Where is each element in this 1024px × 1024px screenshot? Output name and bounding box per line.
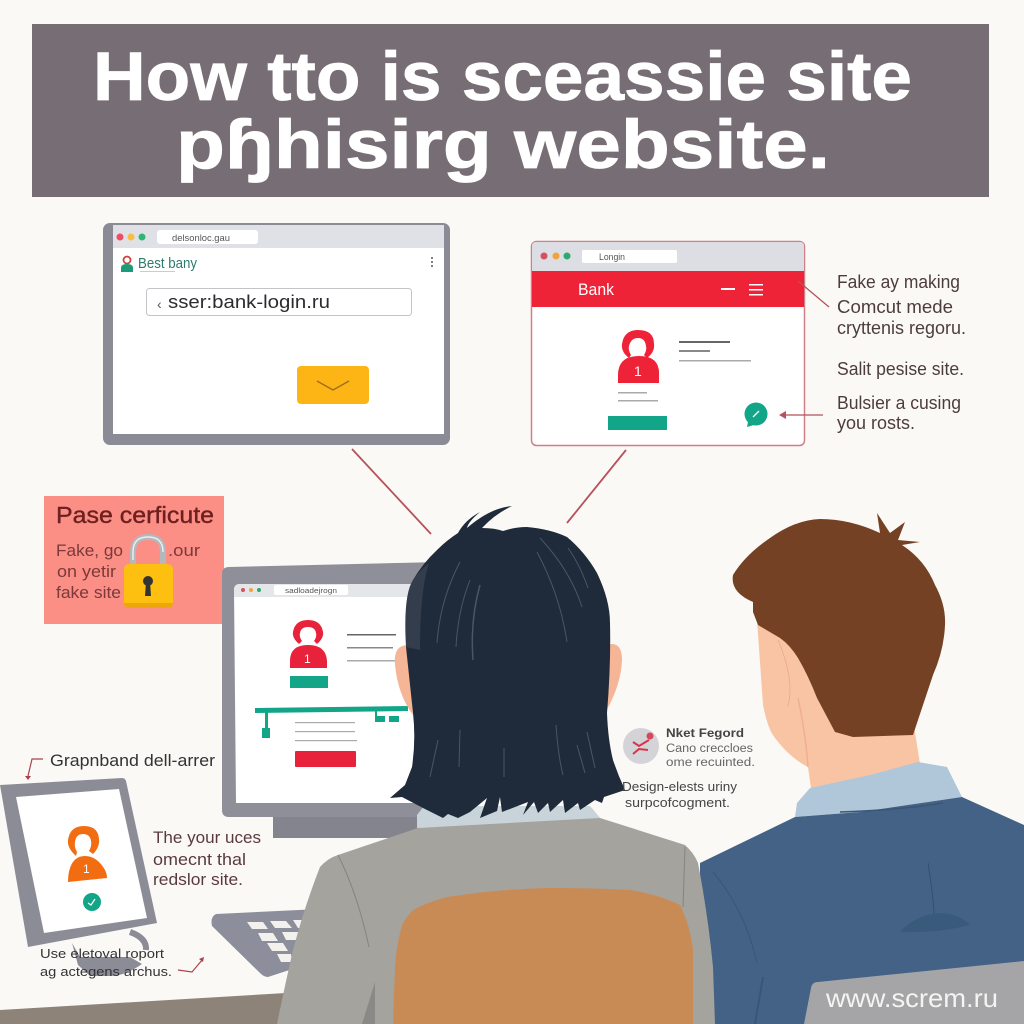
- text block: design: [622, 779, 738, 810]
- desk: [0, 991, 320, 1024]
- woman hair: [390, 506, 625, 818]
- panel: fake browser window: delsonloc.gau: [172, 233, 230, 244]
- title: [32, 24, 989, 197]
- panel: fake browser window: [103, 223, 450, 445]
- text block: right annotations: cryttenis regoru.: [837, 318, 966, 338]
- panel: certificate callout: Pase cerficute: [56, 502, 214, 528]
- address field: ‹: [157, 296, 162, 312]
- chair: [393, 888, 693, 1024]
- address field: [146, 288, 412, 316]
- keyboard: [212, 909, 320, 977]
- red button: [295, 751, 356, 767]
- text block: the your uces: The your uces: [153, 828, 261, 847]
- woman collar: [417, 806, 602, 828]
- panel: tablet: [0, 778, 157, 976]
- title: How tto is sceassie site: [93, 38, 912, 115]
- icon: orange padlock person: [68, 826, 107, 882]
- text block: right annotations: Bulsier a cusing: [837, 393, 961, 413]
- man figure: [700, 513, 1024, 1024]
- icon: check badge: [83, 893, 101, 911]
- logo text: Best bany: Best bany: [138, 256, 198, 272]
- panel: certificate callout: Fake, go: [56, 541, 123, 560]
- text block: right annotations: [837, 272, 966, 433]
- text block: use eletoval: ag actegens archus.: [40, 964, 172, 979]
- text block: use eletoval: Use eletoval roport: [40, 946, 164, 961]
- callout: market regard: Cano creccloes: [666, 743, 753, 755]
- panel: fake bank page: Bank: [578, 280, 614, 299]
- panel: desktop monitor: [222, 562, 440, 838]
- icon: red padlock person: 1: [634, 363, 642, 379]
- woman ears: [395, 645, 413, 715]
- arrow: connector top right: [567, 450, 626, 523]
- watermark badge: [804, 961, 1024, 1024]
- icon: red padlock person: [618, 330, 659, 383]
- watermark badge: www.screm.ru: [825, 983, 998, 1013]
- text block: design: Design-elests uriny: [622, 779, 738, 794]
- panel: certificate callout: .our: [168, 541, 200, 560]
- man collar: [795, 762, 962, 817]
- text block: right annotations: Fake ay making: [837, 272, 960, 292]
- text block: the your uces: omecnt thal: [153, 850, 246, 869]
- icon: gold padlock: [124, 537, 173, 608]
- label: grapnband: Grapnband dell-arrer: [50, 752, 216, 770]
- arrow: connector top left: [352, 449, 431, 534]
- text block: design: surpcofcogment.: [625, 795, 730, 810]
- panel: certificate callout: [44, 496, 224, 624]
- callout: market regard: ome recuinted.: [666, 757, 755, 769]
- text block: right annotations: Salit pesise site.: [837, 359, 964, 379]
- icon: orange padlock person: 1: [83, 862, 90, 876]
- icon: yellow email button: [297, 366, 369, 404]
- icon: red padlock person: 1: [304, 652, 311, 666]
- man jacket: [700, 797, 1024, 1024]
- man neck and face: [757, 620, 925, 795]
- text block: use eletoval: [40, 946, 204, 979]
- panel: fake bank page: [532, 242, 804, 446]
- text block: the your uces: [153, 828, 261, 889]
- icon: chat check bubble: [744, 402, 768, 427]
- panel: certificate callout: fake site: [56, 583, 121, 602]
- callout: market regard: [623, 728, 755, 769]
- text block: the your uces: redslor site.: [153, 870, 243, 889]
- icon: red padlock person: [290, 620, 327, 668]
- text block: right annotations: Comcut mede: [837, 297, 953, 317]
- woman figure: [277, 506, 715, 1024]
- teal connector diagram: [255, 706, 408, 738]
- title: pɧhisirg website.: [176, 106, 830, 183]
- text block: right annotations: you rosts.: [837, 413, 915, 433]
- panel: desktop monitor: sadloadejrogn: [285, 588, 337, 595]
- address field: sser:bank-login.ru: [168, 292, 330, 312]
- panel: fake bank page: Longin: [599, 252, 625, 262]
- man hair: [733, 513, 945, 737]
- callout: market regard: Nket Fegord: [666, 728, 744, 740]
- arrow: band pointer: [798, 281, 829, 307]
- icon: grey circle mark: [623, 728, 659, 764]
- arrow: chat pointer: [779, 411, 823, 419]
- panel: certificate callout: on yetir: [57, 562, 116, 581]
- label: grapnband: [25, 752, 216, 780]
- green button: [608, 416, 667, 430]
- icon: bank logo person: [121, 256, 133, 272]
- woman jacket: [277, 818, 715, 1024]
